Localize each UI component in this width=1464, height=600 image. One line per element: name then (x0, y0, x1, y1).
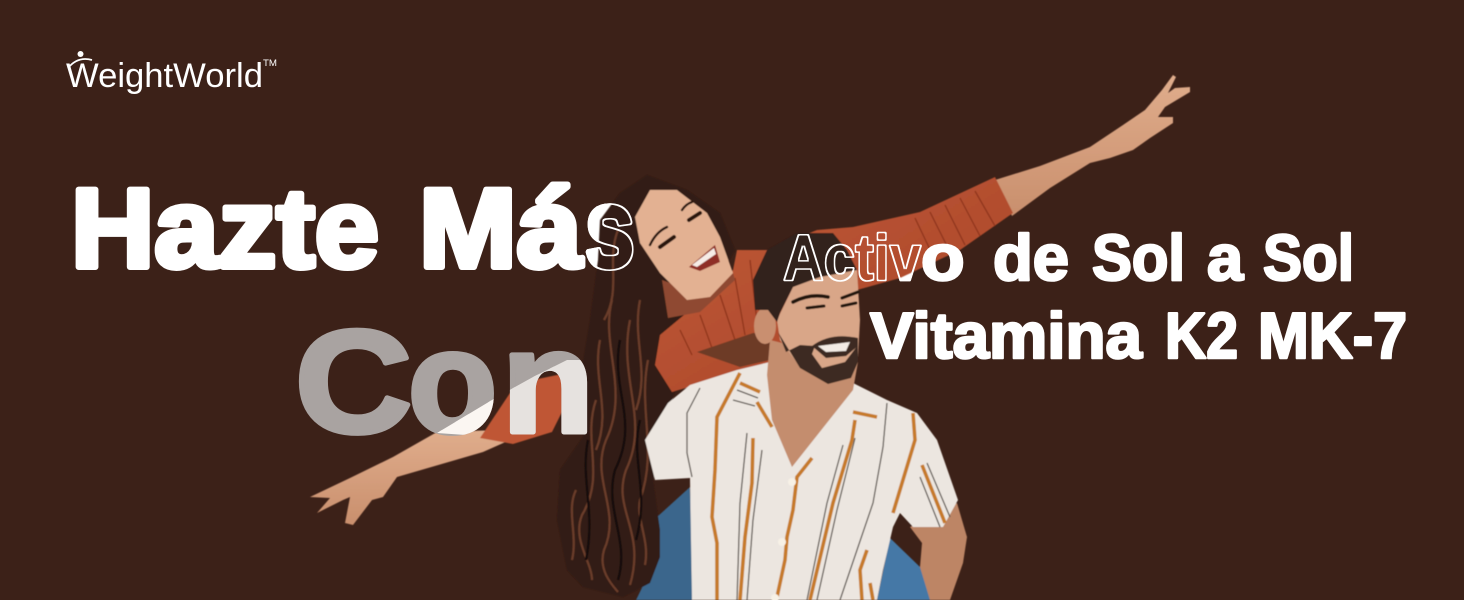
heading: Con: o (408, 300, 497, 463)
shirt buttons (771, 478, 796, 600)
photo: couple (310, 75, 1190, 600)
man's neck and chest (767, 340, 858, 467)
subheading first line: o de Sol a Sol: de (993, 221, 1069, 294)
woman's neck shadow (662, 273, 735, 318)
logo: WeightWorld: WeightWorld (66, 57, 263, 95)
sweater ribs (680, 191, 995, 355)
man's moustache and smile (812, 336, 858, 358)
icon: logo figure (68, 51, 92, 68)
subheading first line: o de Sol a Sol (921, 221, 1354, 294)
subheading second line: Vitamina K2 MK-7: K2 (1165, 299, 1238, 372)
heading: Con: n (502, 301, 594, 464)
hair highlights (572, 230, 648, 592)
man's arm (910, 503, 967, 600)
subheading first line: o de Sol a Sol: Sol (1263, 221, 1354, 294)
man's beard (778, 332, 858, 384)
logo: WeightWorld: TM (263, 58, 277, 68)
subheading first line: o de Sol a Sol: Sol (1092, 221, 1185, 294)
subheading first line: o de Sol a Sol: a (1207, 221, 1244, 294)
outlined letters over figures: Activ (783, 221, 921, 294)
woman's face (635, 190, 733, 300)
shirt dark stripes (687, 388, 950, 600)
outlined letters over figures: s (585, 167, 635, 291)
heading behind figures: Hazte Más (71, 166, 635, 291)
woman's sweater torso and sleeve (655, 177, 1013, 392)
woman's eyes and brows (650, 202, 700, 247)
woman's lowered sleeve (480, 374, 568, 444)
heading behind figures: Hazte Más: Má (419, 166, 583, 291)
Con highlight over arm: o (408, 300, 497, 463)
woman's raised arm (995, 75, 1190, 216)
subheading first line: o de Sol a Sol: o (921, 222, 965, 294)
man's shirt (645, 362, 958, 600)
man's hair (753, 233, 857, 322)
heading behind figures: Hazte Más: Hazte (71, 166, 379, 291)
shirt orange stripes (712, 373, 945, 600)
hair dark curls (586, 340, 641, 580)
Con highlight over arm: n (502, 301, 594, 464)
woman's mouth (689, 245, 720, 271)
subheading second line: Vitamina K2 MK-7: MK-7 (1258, 299, 1407, 372)
subheading second line: Vitamina K2 MK-7: Vitamina (870, 299, 1143, 372)
outlined letters over figures (585, 167, 921, 294)
woman's lowered arm (310, 430, 510, 525)
subheading second line: Vitamina K2 MK-7 (870, 299, 1407, 372)
man's brows and eyes (793, 292, 858, 308)
heading: Con (298, 328, 588, 436)
heading behind figures: Hazte Más: s (585, 167, 635, 291)
jeans (636, 487, 695, 600)
Con highlight over arm (437, 360, 588, 435)
heading: Con: C (295, 299, 412, 463)
woman's midriff (697, 333, 770, 367)
woman's hair (557, 175, 735, 597)
subheading behind figures: Activ: Activ (783, 221, 921, 294)
man's face (777, 270, 860, 383)
man's ear (754, 308, 776, 344)
